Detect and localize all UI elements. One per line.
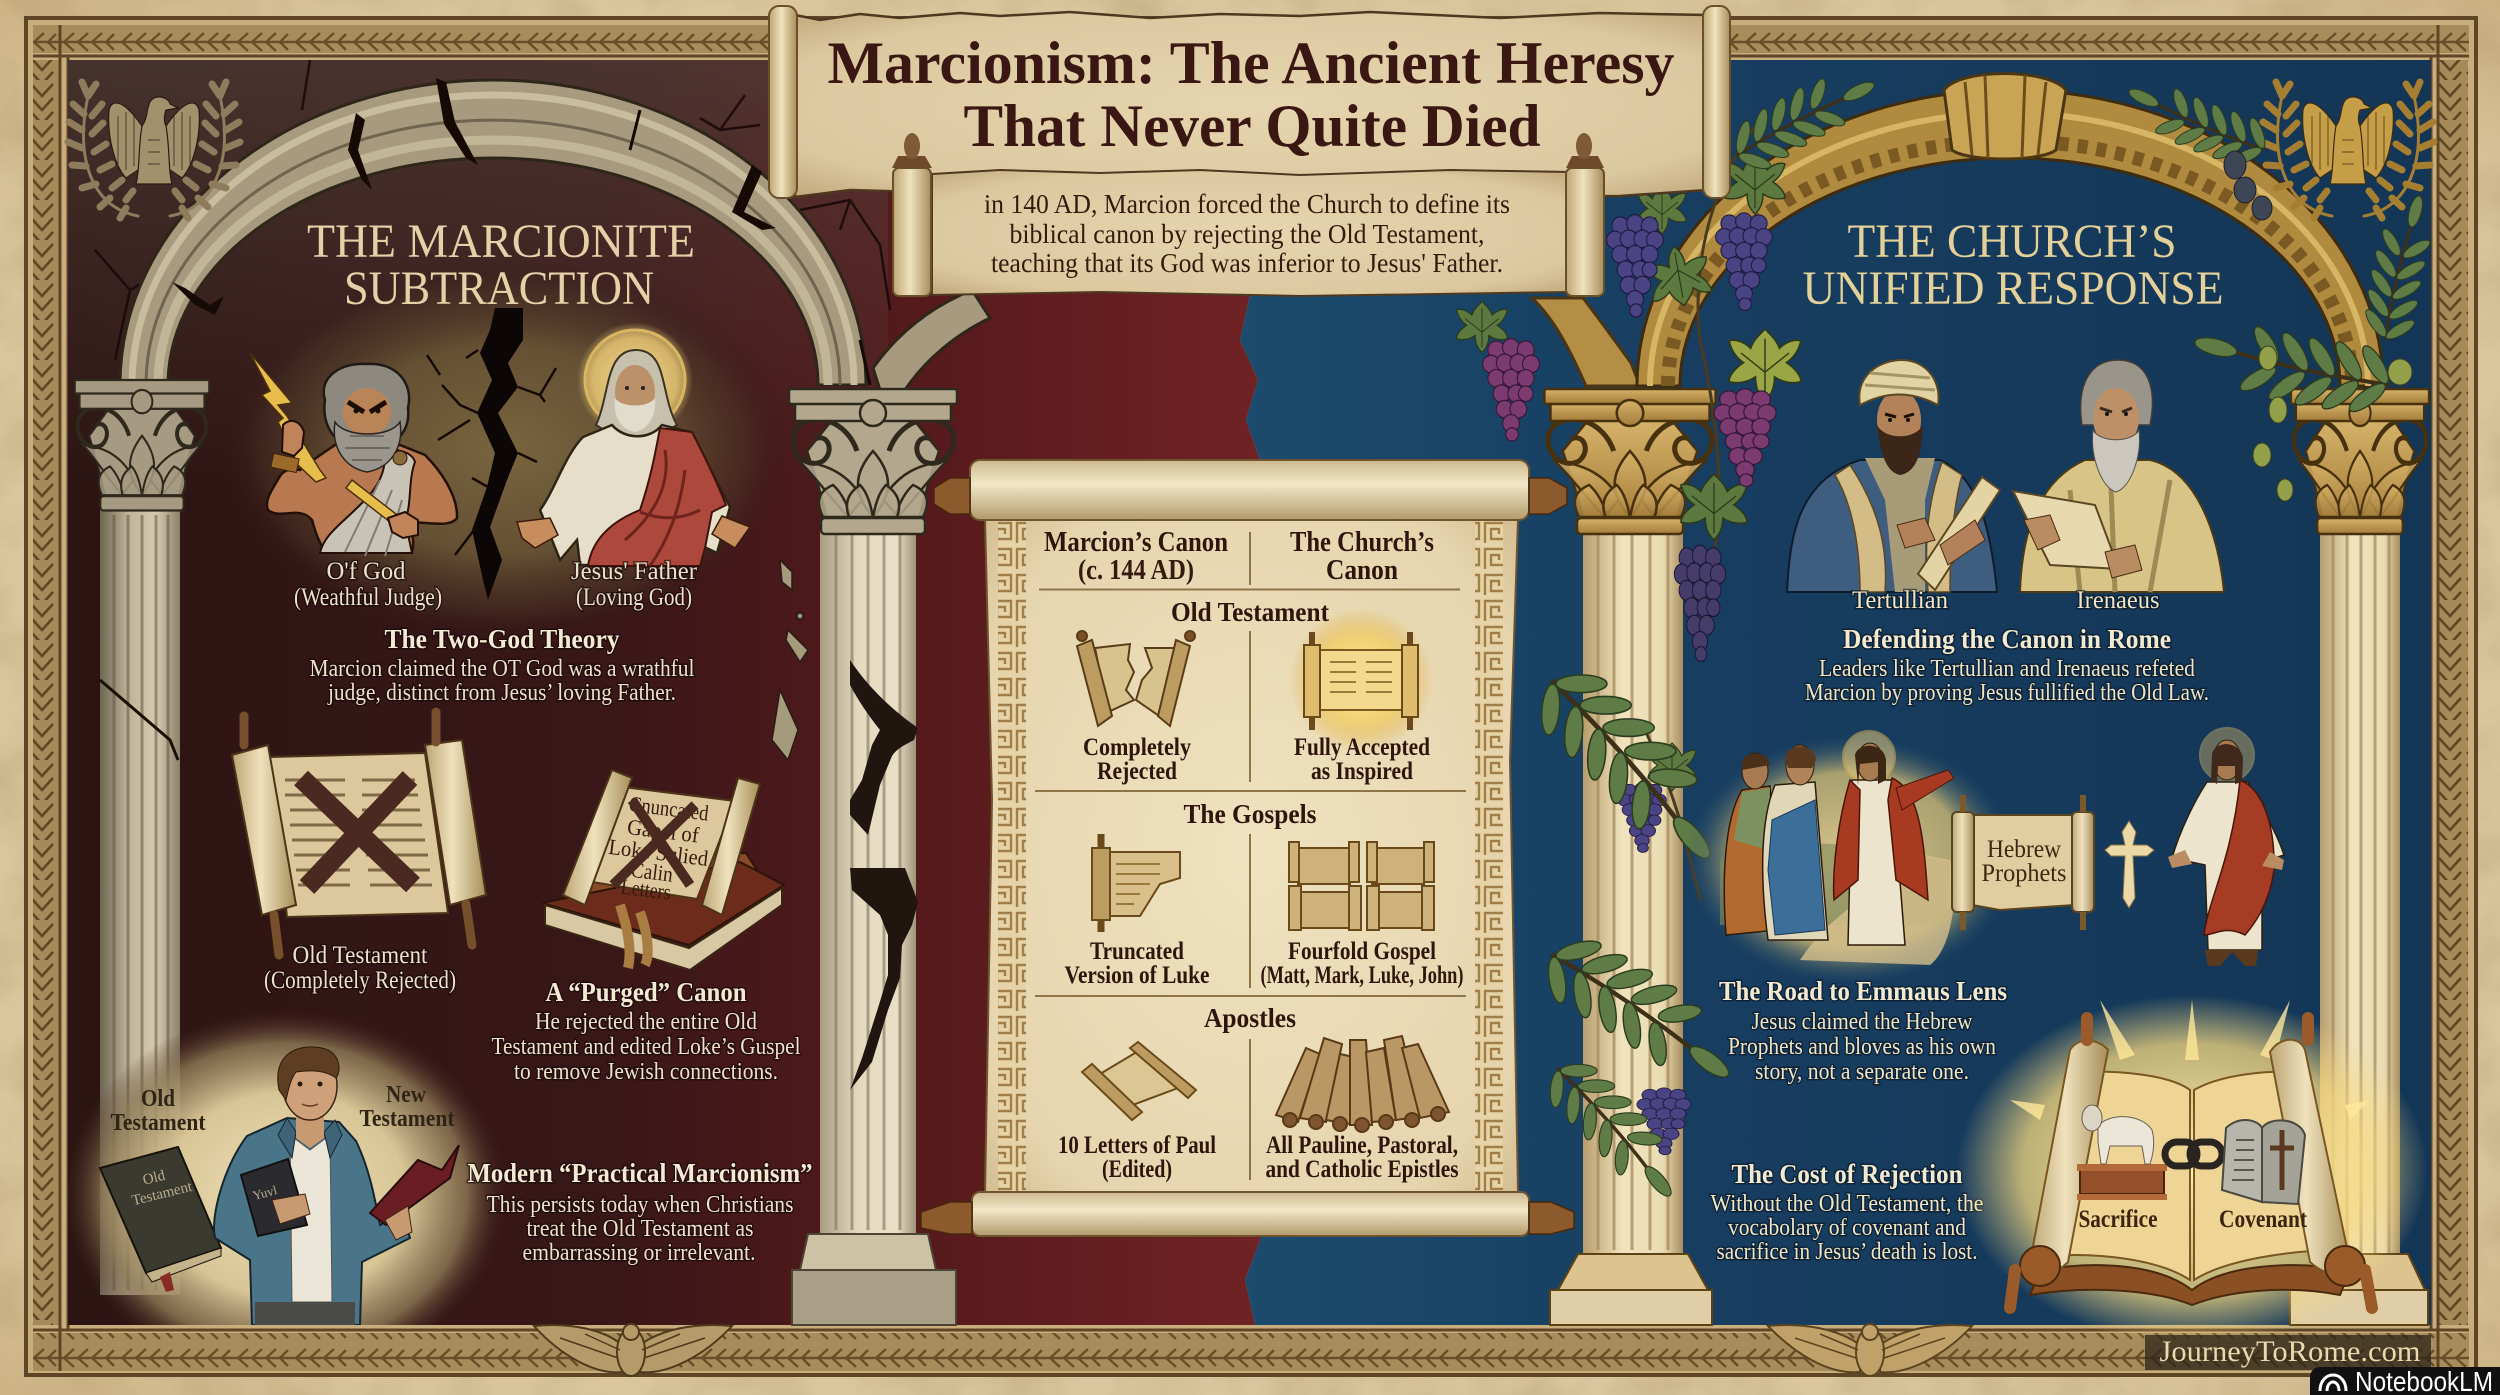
text block: defending the canon: Marcion by proving Jesus fullified the Old Law. [1805,680,2209,706]
broken stone arch [120,78,870,385]
keystone [1944,74,2066,159]
text block: the two-god theory: The Two-God Theory [384,624,620,654]
text block: a purged canon: A “Purged” Canon [546,977,746,1007]
caption: completely rejected [1083,734,1191,785]
column cracks [850,660,918,1090]
table header: (c. 144 AD) [1078,554,1194,586]
text block: cost of rejection: The Cost of Rejection [1732,1159,1962,1189]
text block: a purged canon: He rejected the entire Old [535,1009,757,1035]
icon: dusty old testament book [100,1147,221,1292]
caption: truncated luke [1064,938,1210,989]
row heading: apostles: Apostles [1204,1003,1296,1033]
icon: purged canon scroll on books: Calin [630,857,674,887]
caption: fully accepted: as Inspired [1311,758,1413,785]
figure: modern christian: Yuvl [251,1182,279,1203]
icon: purged canon scroll on books: Cnuncated [628,791,710,826]
labels: testaments: Testament [360,1106,454,1132]
table dividers [1035,532,1466,1180]
labels: sacrifice covenant: Covenant [2219,1206,2308,1233]
icon: purged canon scroll on books: Loke Sulied [607,834,710,871]
modern reader scene [72,1018,497,1325]
wall cracks [95,60,890,360]
text block: road to emmaus: Prophets and bloves as his own [1728,1034,1996,1060]
text block: a purged canon [492,977,801,1085]
text block: road to emmaus [1719,976,2007,1085]
figure: irenaeus [2013,360,2224,592]
column: far right [2290,389,2429,1325]
icon: stone tablets [2222,1120,2305,1204]
figure: jesus pointing [1834,731,1954,945]
stone fragments [772,560,808,760]
glowing covenant book scroll [1957,995,2427,1345]
heading: the marcionite subtraction [307,215,695,315]
caption: fourfold gospel: Fourfold Gospel [1288,938,1436,965]
icon: bottom right eagle [1768,1324,1972,1376]
central canon scroll [921,460,1574,1236]
subtitle text [984,189,1510,278]
text block: road to emmaus: Jesus claimed the Hebrew [1752,1009,1973,1035]
row heading: old testament: Old Testament [1171,597,1329,627]
captions: two gods: Jesus' Father [571,558,698,585]
text block: road to emmaus: The Road to Emmaus Lens [1719,976,2007,1006]
icon: purged canon scroll on books: Gapel of [626,814,701,848]
figure: modern christian [214,1047,459,1325]
caption: old testament rejected: Old Testament [292,942,428,969]
icon: purged canon scroll on books [542,770,784,970]
icon: left eagle and laurel [68,82,240,218]
labels: testaments: Old [141,1086,176,1112]
text block: the two-god theory: judge, distinct from Jesus’ loving Father. [327,680,676,706]
text block: defending the canon: Defending the Canon in Rome [1843,624,2171,654]
text block: modern practical marcionism: Modern “Practical Marcionism” [468,1158,812,1188]
watermark band: JourneyToRome.com [2160,1335,2420,1368]
title text: Marcionism: The Ancient Heresy [828,30,1674,96]
table header: Marcion’s Canon [1044,526,1228,558]
icon: torn scroll [1077,631,1195,726]
table header: The Church’s [1290,526,1434,558]
icon: right eagle and laurel [2262,82,2434,218]
captions: two gods: (Weathful Judge) [294,584,442,611]
icon: cross [2105,821,2154,908]
caption: all epistles: and Catholic Epistles [1266,1156,1459,1183]
icon: lamb on altar [2077,1105,2167,1200]
title text [828,30,1674,159]
caption: truncated luke: Truncated [1090,938,1184,965]
labels: testaments: Testament [110,1110,206,1136]
text block: cost of rejection [1710,1159,1984,1265]
text block: cost of rejection: sacrifice in Jesus’ death is lost. [1716,1239,1978,1265]
olive branches [1719,55,1888,182]
icon: truncated scroll [1092,834,1180,932]
caption: old testament rejected: (Completely Rejected) [264,967,456,994]
scroll rollers [970,460,1529,520]
heading: the church's unified response: UNIFIED RESPONSE [1802,262,2224,315]
icon: black fissure [427,308,556,600]
figure: standing jesus [2168,728,2284,966]
caption: fully accepted [1294,734,1430,785]
heading: the church's unified response: THE CHURCH’S [1848,215,2176,268]
captions: church fathers: Irenaeus [2076,587,2160,614]
title text: That Never Quite Died [964,93,1540,159]
subtitle scroll [892,133,1604,296]
caption: fully accepted: Fully Accepted [1294,734,1430,761]
labels: testaments [110,1086,454,1130]
text block: cost of rejection: vocabolary of covenant and [1728,1215,1966,1241]
text block: defending the canon [1805,624,2209,706]
captions: church fathers [1852,587,2160,614]
icon: glowing accepted scroll [1289,608,1433,752]
text block: a purged canon: to remove Jewish connections. [514,1059,778,1085]
icon: rejected old testament scroll [232,712,486,955]
subtitle text: in 140 AD, Marcion forced the Church to define its [984,189,1510,219]
text block: the two-god theory [310,624,695,706]
panel: church background [1240,60,2431,1325]
row heading: the gospels: The Gospels [1184,799,1316,829]
text block: road to emmaus: story, not a separate one. [1755,1059,1969,1085]
column: center left cracked [789,389,957,1325]
road to emmaus scene [1685,731,2015,985]
gold arch second springing [1532,298,1640,386]
icon: dusty old testament book: Old [141,1168,167,1189]
icon: dusty old testament book: Testament [130,1179,195,1209]
caption: all epistles: All Pauline, Pastoral, [1266,1132,1458,1159]
weathered wall tint [68,60,888,480]
subtitle text: biblical canon by rejecting the Old Testament, [1010,219,1484,249]
column: far left broken [75,380,209,1295]
icon: bottom left eagle [534,1324,732,1376]
arch interior glow [220,260,790,640]
caption: completely rejected: Rejected [1097,758,1177,785]
icon: four gospel scrolls [1289,842,1434,930]
subtitle text: teaching that its God was inferior to Jesus' Father. [991,248,1503,278]
arch cracks [172,78,776,315]
heading: the church's unified response [1802,215,2224,315]
title scroll [769,6,1730,198]
text block: cost of rejection: Without the Old Testament, the [1710,1191,1984,1217]
second stone arch springing [873,290,990,390]
icon: pile of scrolls [1276,1036,1449,1132]
icon: hebrew prophets scroll: Hebrew [1987,836,2061,863]
caption: completely rejected: Completely [1083,734,1191,761]
caption: ten letters [1058,1132,1216,1183]
heading: the marcionite subtraction: SUBTRACTION [344,262,654,315]
captions: two gods [294,558,698,611]
text block: modern practical marcionism: This persists today when Christians [486,1192,794,1218]
heading: the marcionite subtraction: THE MARCIONITE [307,215,695,268]
captions: church fathers: Tertullian [1852,587,1948,614]
caption: fourfold gospel: (Matt, Mark, Luke, John) [1260,962,1464,989]
caption: ten letters: (Edited) [1102,1156,1172,1183]
figure: loving father [517,322,750,566]
caption: all epistles [1266,1132,1459,1183]
caption: ten letters: 10 Letters of Paul [1058,1132,1216,1159]
icon: hebrew prophets scroll [1952,795,2094,930]
table header [1044,526,1434,586]
labels: testaments: New [386,1082,427,1108]
vines and grapes [1456,55,2450,1218]
captions: two gods: O'f God [326,558,406,585]
labels: sacrifice covenant [2078,1206,2308,1233]
figure: tertullian [1787,360,2000,592]
text block: a purged canon: Testament and edited Loke’s Guspel [492,1034,801,1060]
icon: chain link [2165,1142,2222,1166]
icon: purged canon scroll on books: Letters [620,874,672,905]
figure: wrathful god [250,353,457,556]
text block: modern practical marcionism [468,1158,812,1266]
panel: marcionite background [68,60,1260,1325]
caption: old testament rejected [264,942,456,994]
text block: the two-god theory: Marcion claimed the OT God was a wrathful [310,656,695,682]
figure: disciple two [1763,745,1828,940]
captions: two gods: (Loving God) [576,584,692,611]
column: center right [1544,389,1716,1325]
caption: truncated luke: Version of Luke [1064,962,1210,989]
icon: hebrew prophets scroll: Prophets [1982,860,2066,887]
gold arch [1637,74,2383,386]
text block: defending the canon: Leaders like Tertullian and Irenaeus refeted [1819,656,2195,682]
text block: modern practical marcionism: treat the Old Testament as [526,1216,754,1242]
text block: modern practical marcionism: embarrassing or irrelevant. [522,1240,756,1266]
table header: Canon [1326,554,1398,586]
figure: disciple one [1724,753,1778,935]
labels: sacrifice covenant: Sacrifice [2078,1206,2158,1233]
icon: diagonal scroll [1082,1042,1196,1120]
caption: fourfold gospel [1260,938,1464,989]
